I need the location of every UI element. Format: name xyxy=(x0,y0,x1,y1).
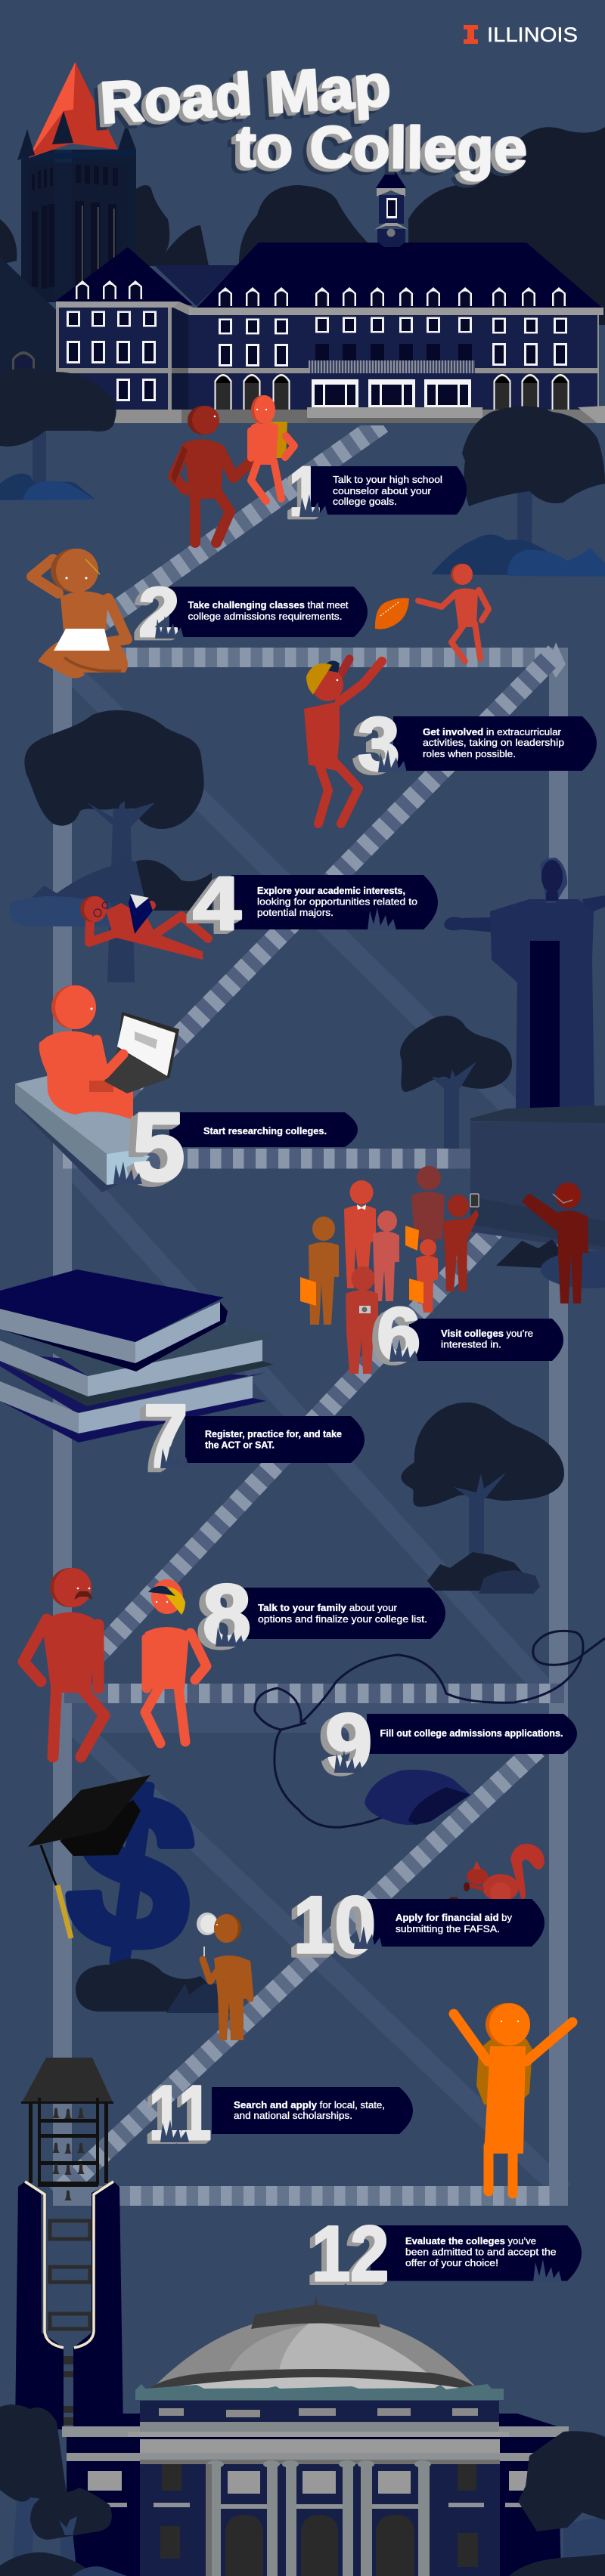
tower pillars xyxy=(15,2182,123,2429)
visitors: brown visitor with bag xyxy=(300,1217,339,1325)
step 6 callout: interested in. xyxy=(441,1339,501,1350)
person: student with laptop step 5 xyxy=(39,985,179,1120)
tree middle step 5 xyxy=(400,1016,512,1149)
faint background diagonals xyxy=(62,665,563,2191)
front steps xyxy=(108,406,605,423)
road: segment after step 2 xyxy=(113,642,568,678)
step 8 callout xyxy=(239,1588,445,1639)
bottom right tree xyxy=(509,2431,605,2576)
step 8 callout: options and finalize your college list. xyxy=(258,1613,427,1625)
number 6: 6 xyxy=(377,1291,420,1376)
road: diagonal from step 3 to 5 xyxy=(64,653,556,1154)
step 8 callout: Talk to your family about your xyxy=(258,1602,398,1613)
campus tower xyxy=(17,62,136,302)
step 2 callout xyxy=(169,586,368,637)
step 9 callout: Fill out college admissions applications. xyxy=(380,1727,563,1739)
person: student with magnifier step 11 xyxy=(197,1913,250,2040)
step 12 callout: Evaluate the colleges you’ve xyxy=(405,2235,536,2247)
road: bottom segment xyxy=(53,2186,568,2206)
step 11 callout: and national scholarships. xyxy=(234,2110,352,2121)
teal cornice xyxy=(135,2384,504,2400)
tower spire xyxy=(17,62,136,160)
person: student reading step 4 xyxy=(80,894,208,960)
number 11: 11 xyxy=(149,2070,211,2156)
number 9: 9 xyxy=(325,1697,372,1789)
step 4 callout: looking for opportunities related to xyxy=(257,896,417,907)
cupola xyxy=(374,165,408,247)
visitors: visitor with bow tie xyxy=(344,1180,376,1288)
number 10: 10 xyxy=(293,1879,376,1970)
computer mouse with cord xyxy=(255,1631,605,1827)
step 1 callout: college goals. xyxy=(333,496,397,507)
step 7 callout: Register, practice for, and take xyxy=(205,1428,342,1440)
wings xyxy=(67,2414,561,2576)
number 5: 5 xyxy=(132,1093,185,1201)
bench step 5 xyxy=(15,1076,150,1192)
center block xyxy=(62,2401,569,2576)
step 6 callout xyxy=(409,1319,563,1361)
person: student with backpack step 1 xyxy=(251,395,294,501)
road: diagonal from step 9 to 11 xyxy=(57,1749,537,2195)
number 2: 2 xyxy=(138,574,179,651)
statue xyxy=(444,858,605,1109)
visitors: maroon visitor xyxy=(405,1166,445,1267)
step 12 callout: been admitted to and accept the xyxy=(405,2246,557,2258)
graduation cap xyxy=(28,1775,150,1938)
number 12: 12 xyxy=(312,2210,389,2297)
step 12 callout xyxy=(371,2225,582,2281)
bush left step 4 xyxy=(10,860,212,926)
campus building, left church xyxy=(0,257,56,393)
title: Road Map xyxy=(98,52,392,136)
tree step 3 xyxy=(24,710,204,982)
number 1: 1 xyxy=(289,452,321,530)
person: graduate step 12 xyxy=(454,2003,572,2194)
laptop xyxy=(104,1012,179,1093)
step 11 callout: Search and apply for local, state, xyxy=(234,2099,385,2111)
main hall roof xyxy=(56,243,602,308)
bottom left trees xyxy=(0,2404,127,2576)
step 10 callout: Apply for financial aid by xyxy=(396,1912,513,1923)
ground floor arches xyxy=(215,374,569,414)
step 3 callout: activities, taking on leadership xyxy=(423,737,564,748)
ground strip of campus xyxy=(0,423,605,425)
dollar sign: $ xyxy=(54,1742,209,2002)
person: parent step 8 xyxy=(23,1568,104,1757)
step 3 callout xyxy=(393,716,597,771)
step 1 callout: counselor about your xyxy=(333,485,432,496)
statue pedestal xyxy=(470,1106,605,1288)
step 4 callout: potential majors. xyxy=(257,907,334,918)
step 1 callout xyxy=(309,466,467,515)
road frame posts xyxy=(53,648,568,2206)
number 3: 3 xyxy=(358,702,400,787)
number 4: 4 xyxy=(193,861,241,945)
title: to College xyxy=(236,113,528,181)
facade windows xyxy=(67,311,567,401)
tree right of campus xyxy=(431,407,605,577)
person: counselor step 1 xyxy=(171,406,251,543)
step 5 callout xyxy=(169,1112,358,1147)
person: student with paper step 2 xyxy=(32,549,128,679)
tour guide xyxy=(525,1183,588,1303)
number 7: 7 xyxy=(144,1386,188,1486)
balcony xyxy=(309,360,475,373)
road: segment after step 5 xyxy=(63,1149,471,1168)
road: diagonal from step 1 to 2 xyxy=(91,423,382,629)
step 4 callout: Explore your academic interests, xyxy=(257,885,405,896)
visitors: small visitor xyxy=(409,1239,438,1313)
grass tufts at number bases xyxy=(113,494,562,2282)
bush step 10 xyxy=(76,1959,234,2013)
step 9 callout xyxy=(367,1714,577,1754)
person: jumping student step 3 xyxy=(304,659,382,824)
step 3 callout: roles when possible. xyxy=(423,748,516,759)
step 7 callout: the ACT or SAT. xyxy=(205,1439,275,1451)
step 2 callout: college admissions requirements. xyxy=(188,611,342,622)
title xyxy=(98,52,528,181)
visitors: visitor with phone xyxy=(443,1194,479,1291)
football xyxy=(375,598,409,629)
number 8: 8 xyxy=(203,1568,251,1663)
step 2 callout: Take challenging classes that meet xyxy=(188,599,349,611)
dormer windows xyxy=(76,280,566,306)
step 1 callout: Talk to your high school xyxy=(333,474,442,485)
step 3 callout: Get involved in extracurricular xyxy=(423,726,562,738)
road: segment after step 8 xyxy=(64,1684,564,1733)
step 4 callout xyxy=(231,875,438,929)
logo: Illinois: ILLINOIS xyxy=(487,23,578,46)
squirrel xyxy=(449,1844,544,1906)
main hall facade xyxy=(56,280,605,423)
tree step 8 xyxy=(401,1402,564,1594)
books stack xyxy=(0,1269,276,1443)
person: student with cap step 8 xyxy=(145,1579,206,1743)
step 11 callout xyxy=(212,2087,413,2134)
tree lower left of campus xyxy=(0,367,116,500)
step 5 callout: Start researching colleges. xyxy=(203,1125,327,1136)
step 12 callout: offer of your choice! xyxy=(405,2257,498,2268)
domed auditorium xyxy=(62,2296,569,2576)
step 7 callout xyxy=(185,1416,365,1463)
visitors: visitor with camera xyxy=(346,1266,378,1374)
person: football player step 2 xyxy=(418,564,489,661)
bell tower: carillon xyxy=(15,2058,123,2429)
road: diagonal from step 6 to 8 xyxy=(68,1224,499,1685)
step 6 callout: Visit colleges you’re xyxy=(441,1328,533,1339)
visitors: pink visitor xyxy=(373,1211,399,1301)
step 10 callout xyxy=(358,1899,544,1947)
background trees behind campus xyxy=(0,127,605,325)
step 10 callout: submitting the FAFSA. xyxy=(396,1923,500,1934)
